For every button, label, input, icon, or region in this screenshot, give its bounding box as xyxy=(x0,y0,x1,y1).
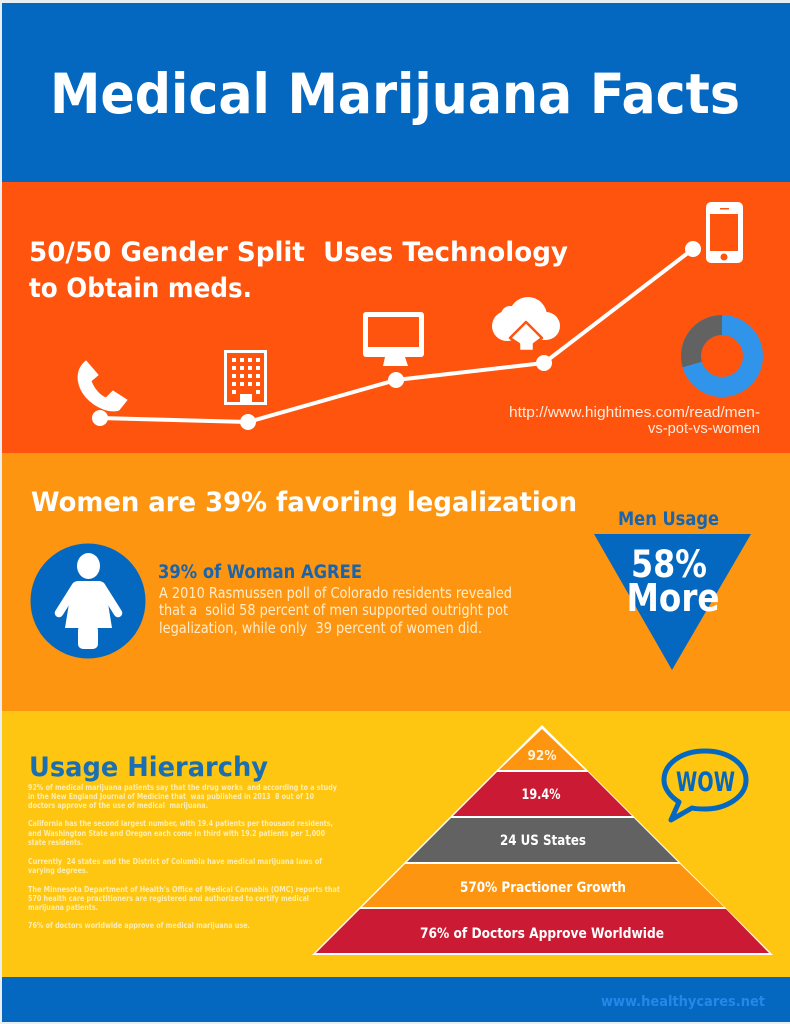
text block: usage facts: California has the second largest number, with 19.4 patients per thousand residents, xyxy=(28,819,333,828)
pyramid chart xyxy=(312,725,773,955)
text block: Rasmussen poll: A 2010 Rasmussen poll of Colorado residents revealed xyxy=(159,584,512,602)
panel: footer xyxy=(2,977,790,1022)
donut chart: gender split xyxy=(691,325,753,387)
title: Medical Marijuana Facts xyxy=(50,62,740,126)
label: men usage: Men Usage xyxy=(618,509,719,530)
text block: usage facts: marijuana patients. xyxy=(28,903,98,912)
icon: wow speech bubble xyxy=(664,751,746,820)
pyramid tier: 24 US States: 24 US States xyxy=(500,833,586,849)
source link: vs-pot-vs-women xyxy=(648,420,760,437)
heading: gender split: to Obtain meds. xyxy=(29,273,252,304)
text block: usage facts: in the New England Journal of Medicine that was published in 2013 8 out of 10 xyxy=(28,792,314,801)
text block: Rasmussen poll: legalization, while only 39 percent of women did. xyxy=(159,619,482,637)
footer website: www.healthycares.net xyxy=(601,994,765,1010)
panel: women legalization xyxy=(2,453,790,711)
icon: desktop monitor xyxy=(363,312,424,366)
callout: 58% more triangle: 58% xyxy=(631,543,707,586)
icon: smartphone xyxy=(706,202,743,263)
source link: http://www.hightimes.com/read/men- xyxy=(509,404,760,421)
icon: woman in circle xyxy=(30,544,146,658)
text block: usage facts: The Minnesota Department of Health's Office of Medical Cannabis (OMC) reports that xyxy=(28,885,340,894)
heading: usage hierarchy: Usage Hierarchy xyxy=(29,752,268,783)
text block: usage facts: varying degrees. xyxy=(28,866,88,875)
pyramid tier: 92%: 92% xyxy=(528,748,557,764)
heading: gender split: 50/50 Gender Split Uses Technology xyxy=(29,237,568,268)
text block: usage facts: Currently 24 states and the District of Columbia have medical marijuana laws of xyxy=(28,857,322,866)
panel: usage hierarchy xyxy=(2,711,790,977)
panel: header xyxy=(2,3,790,182)
pyramid tier: 570% Practioner Growth: 570% Practioner Growth xyxy=(460,880,626,896)
icon: office building xyxy=(226,352,266,404)
icon: cloud upload xyxy=(492,297,560,351)
text block: usage facts: 76% of doctors worldwide approve of medical marijuana use. xyxy=(28,921,250,930)
callout: 58% more triangle xyxy=(594,534,751,670)
text block: usage facts: doctors approve of the use of medical marijuana. xyxy=(28,801,208,810)
pyramid tier: 570% Practioner Growth xyxy=(362,864,724,907)
text block: usage facts: state residents. xyxy=(28,838,83,847)
text block: usage facts: 92% of medical marijuana patients say that the drug works and according to a study xyxy=(28,783,338,792)
pyramid tier: 76% of Doctors: 76% of Doctors Approve Worldwide xyxy=(420,926,664,942)
pyramid tier: 76% of Doctors xyxy=(316,909,769,953)
icon: wow speech bubble: WOW xyxy=(676,767,735,798)
text block: Rasmussen poll: that a solid 58 percent of men supported outright pot xyxy=(159,601,508,619)
text block: usage facts: and Washington State and Oregon each come in third with 19.2 patients per 1,000 xyxy=(28,829,325,838)
pyramid tier: 19.4%: 19.4% xyxy=(522,787,561,803)
icon: telephone handset xyxy=(78,361,127,411)
callout: 58% more triangle: More xyxy=(626,576,720,620)
pyramid tier: 24 US States xyxy=(407,818,678,862)
pyramid tier: 19.4% xyxy=(453,772,632,816)
panel: technology xyxy=(2,182,790,453)
pyramid tier: 92% xyxy=(499,729,585,770)
text block: usage facts: 570 health care practitioners are registered and authorized to certify medical xyxy=(28,894,309,903)
heading: women favoring legalization: Women are 39% favoring legalization xyxy=(31,487,577,518)
line chart: technology path xyxy=(92,241,701,430)
subheading: 39% of woman agree: 39% of Woman AGREE xyxy=(158,562,362,583)
